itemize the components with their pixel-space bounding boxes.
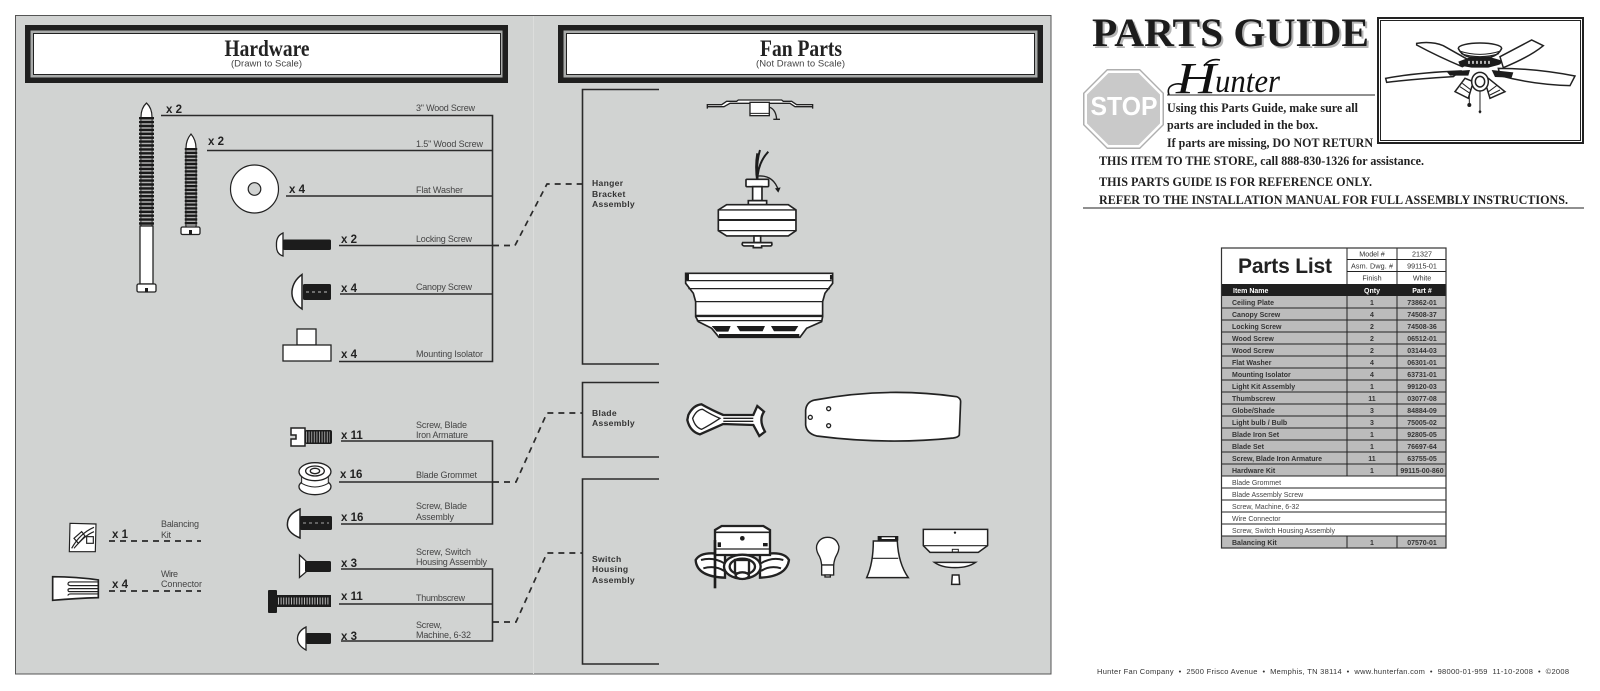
table header labels: [1233, 288, 1432, 295]
grey table rows: [1222, 296, 1446, 548]
icon: wire connector: [53, 577, 98, 600]
logo: Hunter script: unter: [1215, 64, 1280, 100]
bracket: hanger bracket assembly: Hanger: [592, 178, 624, 188]
quantity and name labels: hardware: x 11: [341, 591, 363, 603]
table quantities: 2: [1370, 324, 1374, 331]
table header labels: Part #: [1412, 288, 1432, 295]
quantity and name labels: hardware: Screw, Blade: [416, 501, 467, 511]
quantity and name labels: hardware: x 1: [112, 529, 129, 541]
icon: blade assembly screw: [287, 509, 332, 538]
footer: company address line: Hunter Fan Company • 2500 Frisco Avenue • Memphis, TN 38114 • www.hunterfan.com • 98000-01-959 11-10-2008 • ©2008: [1097, 667, 1569, 676]
icon: 1.5 inch wood screw: [181, 134, 200, 234]
table quantities: 2: [1370, 348, 1374, 355]
text block: stop instructions: THIS ITEM TO THE STORE, call 888-830-1326 for assistance.: [1099, 153, 1424, 168]
quantity and name labels: hardware: Screw, Switch: [416, 547, 471, 557]
table item names: Flat Washer: [1232, 360, 1272, 367]
bracket: hanger bracket assembly: Assembly: [592, 199, 635, 209]
heading: Fan Parts: [558, 25, 1043, 83]
icon: light kit: [696, 526, 789, 588]
icon: glass shade: [867, 536, 908, 578]
icon: blade iron: [687, 404, 765, 436]
table item names: Blade Assembly Screw: [1232, 492, 1304, 499]
table item names: Balancing Kit: [1232, 540, 1277, 547]
icon: locking screw: [276, 233, 331, 256]
table outer border: [1222, 248, 1446, 548]
icon: stop sign: STOP: [1090, 91, 1158, 121]
quantity and name labels: hardware: Kit: [161, 530, 171, 540]
bracket: hanger bracket assembly: [582, 90, 659, 364]
icon: blade grommet: [299, 463, 331, 495]
table part numbers: 99115-00-860: [1400, 468, 1444, 475]
quantity and name labels: hardware: Connector: [161, 579, 202, 589]
table model information: 99115-01: [1407, 262, 1437, 270]
text block: stop instructions: parts are included in the box.: [1167, 117, 1318, 132]
quantity and name labels: hardware: x 4: [112, 579, 129, 591]
dashed connector: switch housing: [493, 553, 582, 622]
quantity and name labels: hardware: [112, 103, 488, 643]
table quantities: 1: [1370, 540, 1374, 547]
table part numbers: [1400, 300, 1444, 547]
table item names: Wood Screw: [1232, 336, 1274, 343]
table item names: Blade Iron Set: [1232, 432, 1280, 439]
icon: blade iron armature screw: [291, 428, 332, 446]
text block: stop instructions: Using this Parts Guide, make sure all: [1167, 100, 1358, 115]
quantity and name labels: hardware: x 2: [208, 136, 224, 148]
table item names: Mounting Isolator: [1232, 372, 1291, 379]
quantity and name labels: hardware: Iron Armature: [416, 430, 468, 440]
table part numbers: 63731-01: [1407, 372, 1437, 379]
heading: Fan Parts: Fan Parts: [760, 36, 842, 61]
heading: Hardware: Hardware: [224, 36, 310, 61]
table item names: Blade Grommet: [1232, 480, 1281, 487]
leader lines: blade hardware group: [339, 441, 492, 524]
table part numbers: 73862-01: [1407, 300, 1437, 307]
bracket: switch housing assembly: [582, 479, 659, 664]
table part numbers: 07570-01: [1407, 540, 1437, 547]
quantity and name labels: hardware: Assembly: [416, 512, 454, 522]
table quantities: 4: [1370, 312, 1374, 319]
table quantities: 1: [1370, 468, 1374, 475]
bracket: blade assembly: Blade: [592, 408, 617, 418]
table part numbers: 63755-05: [1407, 456, 1437, 463]
table column header row: [1222, 284, 1446, 296]
table item names: Screw, Blade Iron Armature: [1232, 456, 1322, 463]
text block: stop instructions: [1099, 100, 1424, 168]
bracket: switch housing assembly: Housing: [592, 564, 628, 574]
quantity and name labels: hardware: x 3: [341, 558, 357, 570]
table item names: Canopy Screw: [1232, 312, 1281, 319]
table model information: Finish: [1362, 274, 1382, 282]
quantity and name labels: hardware: x 16: [341, 512, 363, 524]
dashed connector: blade assembly: [493, 413, 582, 482]
icon: light bulb: [817, 537, 839, 577]
table quantities: 1: [1370, 444, 1374, 451]
icon: switch housing screw: [300, 555, 331, 578]
quantity and name labels: hardware: Blade Grommet: [416, 470, 477, 480]
table quantities: 11: [1368, 456, 1376, 463]
title: PARTS GUIDE: PARTS GUIDE: [1094, 12, 1371, 57]
icon: thumbscrew: [268, 590, 331, 613]
icon: canopy: [686, 273, 833, 338]
table header labels: Item Name: [1233, 288, 1269, 295]
text block: stop instructions: If parts are missing, DO NOT RETURN: [1167, 135, 1374, 150]
panel: grey hardware and fan parts sheet: [16, 16, 1051, 674]
icon: flat washer: [230, 165, 278, 213]
quantity and name labels: hardware: x 4: [289, 184, 306, 196]
table part numbers: 74508-36: [1407, 324, 1437, 331]
text block: reference note: [1083, 174, 1584, 208]
table part numbers: 92805-05: [1407, 432, 1437, 439]
table item names: Blade Set: [1232, 444, 1265, 451]
table quantities: 2: [1370, 336, 1374, 343]
table item names: Screw, Switch Housing Assembly: [1232, 528, 1336, 535]
heading: Fan Parts: (Not Drawn to Scale): [756, 58, 845, 70]
icon: machine screw: [297, 627, 331, 650]
table part numbers: 75005-02: [1407, 420, 1437, 427]
quantity and name labels: hardware: x 11: [341, 430, 363, 442]
quantity and name labels: hardware: Flat Washer: [416, 185, 463, 195]
table item names: Screw, Machine, 6-32: [1232, 504, 1299, 511]
bracket: blade assembly: Assembly: [592, 418, 635, 428]
table item names: Wire Connector: [1232, 516, 1281, 523]
table part numbers: 84884-09: [1407, 408, 1437, 415]
table quantities: 11: [1368, 396, 1376, 403]
table part numbers: 03077-08: [1407, 396, 1437, 403]
table item names: Hardware Kit: [1232, 468, 1276, 475]
quantity and name labels: hardware: Mounting Isolator: [416, 349, 483, 359]
heading: Hardware: (Drawn to Scale): [231, 58, 302, 70]
table quantities: 4: [1370, 372, 1374, 379]
bracket: hanger bracket assembly: Bracket: [592, 189, 626, 199]
leader lines: switch hardware group: [339, 569, 492, 641]
logo: Hunter script: H: [1175, 54, 1219, 103]
quantity and name labels: hardware: Locking Screw: [416, 234, 472, 244]
table item names: Globe/Shade: [1232, 408, 1275, 415]
table header labels: Qnty: [1364, 288, 1380, 295]
quantity and name labels: hardware: x 4: [341, 349, 358, 361]
icon: light kit cap, bowl and finial: [923, 529, 988, 584]
table part numbers: 03144-03: [1407, 348, 1437, 355]
logo: Hunter script: [1167, 54, 1375, 103]
leader lines: upper hardware group: [161, 116, 492, 362]
table part numbers: 06512-01: [1407, 336, 1437, 343]
table model information: [1351, 250, 1437, 282]
icon: ceiling plate: [707, 100, 813, 119]
table model information: 21327: [1412, 250, 1432, 258]
table quantities: 3: [1370, 408, 1374, 415]
image box: ceiling fan illustration: [1378, 18, 1583, 143]
table quantities: 1: [1370, 300, 1374, 307]
table part numbers: 74508-37: [1407, 312, 1437, 319]
table quantities: 1: [1370, 384, 1374, 391]
table item names: Light Kit Assembly: [1232, 384, 1295, 391]
quantity and name labels: hardware: Machine, 6-32: [416, 630, 471, 640]
title: PARTS GUIDE: PARTS GUIDE: [1092, 10, 1369, 55]
text block: reference note: REFER TO THE INSTALLATION MANUAL FOR FULL ASSEMBLY INSTRUCTIONS.: [1099, 192, 1568, 207]
icon: stop sign: [1083, 69, 1164, 149]
table: parts list: [1222, 248, 1446, 548]
icon: mounting isolator: [283, 329, 331, 361]
table quantities: 4: [1370, 360, 1374, 367]
bracket: blade assembly: [582, 382, 659, 457]
quantity and name labels: hardware: Screw, Blade: [416, 420, 467, 430]
table item names: Light bulb / Bulb: [1232, 420, 1287, 427]
quantity and name labels: hardware: Thumbscrew: [416, 593, 466, 603]
table quantities: 3: [1370, 420, 1374, 427]
quantity and name labels: hardware: Balancing: [161, 519, 199, 529]
quantity and name labels: hardware: Canopy Screw: [416, 282, 472, 292]
quantity and name labels: hardware: x 2: [166, 104, 182, 116]
table part numbers: 99120-03: [1407, 384, 1437, 391]
icon: balancing kit: [69, 523, 96, 552]
quantity and name labels: hardware: x 16: [340, 469, 362, 481]
table item names: Ceiling Plate: [1232, 300, 1274, 307]
icon: fan blade: [806, 392, 961, 441]
quantity and name labels: hardware: x 3: [341, 631, 357, 643]
table item names: Wood Screw: [1232, 348, 1274, 355]
quantity and name labels: hardware: 3" Wood Screw: [416, 103, 476, 113]
table item names: [1232, 300, 1336, 547]
icon: 3 inch wood screw: [137, 103, 156, 292]
bracket: switch housing assembly: Switch: [592, 554, 622, 564]
icon: canopy screw: [292, 274, 331, 309]
quantity and name labels: hardware: x 4: [341, 283, 358, 295]
table model information: Model #: [1359, 250, 1385, 258]
dashed connector: hanger bracket: [493, 184, 582, 246]
table model information: White: [1413, 274, 1431, 282]
table item names: Locking Screw: [1232, 324, 1282, 331]
quantity and name labels: hardware: Wire: [161, 569, 178, 579]
heading: Parts List: Parts List: [1238, 255, 1332, 278]
table part numbers: 06301-01: [1407, 360, 1437, 367]
table item names: Thumbscrew: [1232, 396, 1276, 403]
dashed line: wire connector: [109, 590, 201, 592]
table quantities: [1368, 300, 1376, 547]
icon: fan motor: [718, 150, 796, 248]
heading: Hardware: [25, 25, 508, 83]
table part numbers: 76697-64: [1407, 444, 1437, 451]
table model information: Asm. Dwg. #: [1351, 262, 1393, 270]
dashed line: balancing kit: [109, 540, 201, 542]
bracket: switch housing assembly: Assembly: [592, 575, 635, 585]
quantity and name labels: hardware: Housing Assembly: [416, 557, 488, 567]
table quantities: 1: [1370, 432, 1374, 439]
text block: reference note: THIS PARTS GUIDE IS FOR REFERENCE ONLY.: [1099, 174, 1372, 189]
quantity and name labels: hardware: Screw,: [416, 620, 442, 630]
quantity and name labels: hardware: x 2: [341, 234, 357, 246]
quantity and name labels: hardware: 1.5" Wood Screw: [416, 139, 484, 149]
table grid lines: [1222, 248, 1446, 548]
